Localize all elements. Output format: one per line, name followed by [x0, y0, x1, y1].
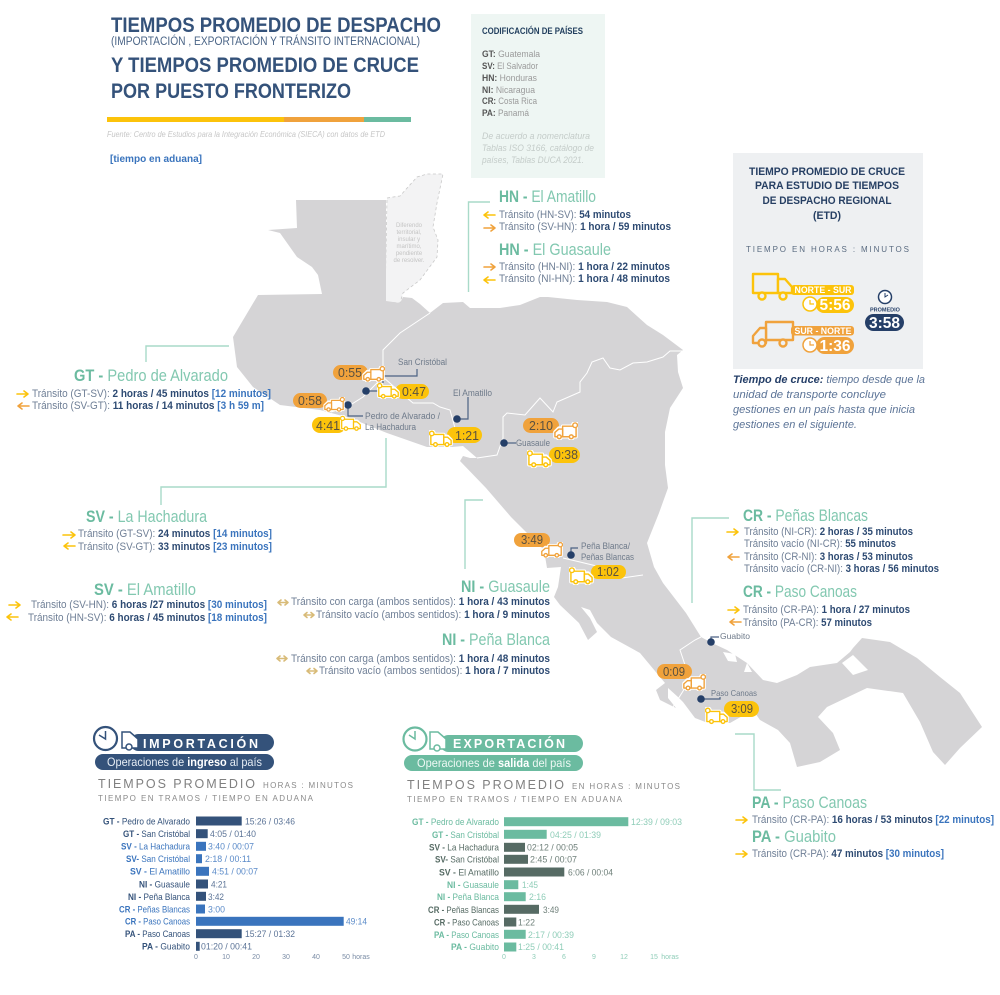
exportación header — [404, 728, 583, 771]
map pin: Paso Canoas: Paso Canoas — [711, 688, 757, 698]
average value: 3:58 — [869, 315, 900, 332]
exportación values: 1:22 — [518, 918, 535, 928]
importación values: 4:21 — [211, 880, 227, 890]
exportación axis: horas — [661, 954, 679, 961]
map pin: Guasaule — [500, 418, 580, 467]
north-south value: NORTE - SUR — [794, 285, 852, 296]
panel: country codes: NI: Nicaragua — [482, 85, 536, 96]
panel: SV La Hachadura — [63, 508, 272, 553]
south-north value: 1:36 — [820, 338, 851, 355]
exportación values: 2:16 — [529, 892, 546, 903]
title: TIEMPOS PROMEDIO DE DESPACHO — [111, 14, 441, 37]
map pin: Paso Canoas: 0:09 — [663, 664, 685, 679]
map pin: Guasaule: 2:10 — [529, 418, 553, 433]
disputed territory: Belize area: Diferendo — [396, 223, 423, 229]
map pin: Guasaule: 0:38 — [554, 447, 578, 462]
south-north value: SUR - NORTE — [794, 326, 852, 337]
exportación row labels: SV - La Hachadura — [429, 842, 500, 854]
map pin: El Amatillo: El Amatillo — [453, 388, 492, 398]
panel: CR Peñas Blancas — [727, 507, 939, 575]
importación axis: 40 — [312, 954, 320, 961]
map pin: Peña Blanca / Peñas Blancas: 3:49 — [521, 532, 543, 547]
importación axis: 10 — [222, 954, 230, 961]
exportación values: 02:12 / 00:05 — [527, 842, 578, 854]
importación values — [201, 816, 367, 952]
panel: CR Peñas Blancas: CR - Peñas Blancas — [743, 507, 868, 525]
landmass — [233, 200, 982, 767]
exportación values — [518, 817, 682, 953]
exportación row labels: CR - Paso Canoas — [434, 918, 499, 928]
panel: CR Paso Canoas: CR - Paso Canoas — [743, 583, 857, 601]
average value: PROMEDIO — [870, 308, 901, 314]
panel: SV La Hachadura: Tránsito (GT-SV): 24 minutos [14 minutos] — [78, 528, 272, 540]
map pin: Pedro de Alvarado / La Hachadura: 0:58 — [298, 393, 322, 408]
exportación axis: 3 — [532, 954, 536, 961]
importación header: Operaciones de ingreso al país — [107, 755, 262, 769]
exportación values: 1:45 — [522, 880, 538, 891]
exportación bars — [504, 817, 628, 952]
panel: country codes — [471, 14, 605, 178]
panel: NI Peña Blanca — [277, 631, 551, 677]
panel: SV El Amatillo: SV - El Amatillo — [94, 581, 196, 599]
map pin: El Amatillo — [429, 388, 492, 447]
importación values: 4:51 / 00:07 — [212, 866, 258, 878]
exportación row labels: NI - Guasaule — [447, 880, 499, 891]
panel: SV La Hachadura: SV - La Hachadura — [86, 508, 208, 526]
map pin: Guabito — [707, 631, 750, 646]
panel: NI Guasaule: NI - Guasaule — [461, 578, 550, 596]
importación row labels: PA - Guabito — [142, 942, 190, 952]
panel: country codes: HN: Honduras — [482, 73, 537, 84]
exportación row labels: PA - Paso Canoas — [434, 930, 499, 941]
importación row labels: NI - Peña Blanca — [128, 892, 191, 903]
south-north value — [791, 326, 854, 355]
map pin: Guasaule: Guasaule — [516, 438, 550, 448]
callout brackets — [146, 202, 781, 790]
importación row labels: SV - El Amatillo — [130, 866, 190, 878]
exportación values: 3:49 — [543, 905, 559, 916]
panel: country codes: Tablas ISO 3166, catálogo de — [482, 143, 594, 154]
panel: HN border posts: HN - El Amatillo — [499, 188, 596, 206]
title: Y TIEMPOS PROMEDIO DE CRUCE — [111, 54, 419, 77]
panel: NI Guasaule: Tránsito vacío (ambos sentidos): 1 hora / 9 minutos — [316, 609, 550, 621]
exportación header: EXPORTACIÓN — [453, 736, 565, 751]
panel: HN border posts: Tránsito (HN-SV): 54 minutos — [499, 209, 631, 221]
panel: GT Pedro de Alvarado: GT - Pedro de Alvarado — [74, 367, 228, 385]
importación values: 2:18 / 00:11 — [205, 854, 251, 865]
panel: country codes: De acuerdo a nomenclatura — [482, 131, 590, 142]
exportación values: 6:06 / 00:04 — [568, 868, 613, 878]
map pin: Peña Blanca / Peñas Blancas: Peña Blanca/ — [581, 541, 630, 551]
exportación row labels: CR - Peñas Blancas — [428, 905, 499, 916]
disputed territory: Belize area: insular y — [398, 237, 420, 243]
importación chart subtitle — [98, 777, 353, 803]
importación chart subtitle: TIEMPOS PROMEDIO — [98, 777, 255, 791]
crossing time definition: unidad de transporte concluye — [733, 389, 886, 401]
map pin: Peña Blanca / Peñas Blancas: 1:02 — [597, 564, 619, 579]
panel: CR Peñas Blancas: Tránsito (NI-CR): 2 horas / 35 minutos — [744, 526, 913, 538]
importación values: 3:00 — [208, 904, 225, 916]
map pin: Peña Blanca / Peñas Blancas: Peñas Blancas — [581, 552, 634, 562]
exportación row labels: SV- San Cristóbal — [435, 854, 499, 866]
map pin: San Cristóbal — [333, 357, 447, 399]
exportación values: 04:25 / 01:39 — [550, 830, 601, 841]
icon: yellow truck, north-south — [753, 274, 792, 300]
panel: CR Paso Canoas — [728, 583, 910, 629]
disputed territory: Belize area: marítimo, — [396, 244, 422, 250]
panel: country codes: CR: Costa Rica — [482, 96, 538, 107]
panel: average crossing time: DE DESPACHO REGIONAL — [762, 195, 892, 207]
exportación row labels: GT - Pedro de Alvarado — [412, 817, 499, 828]
panel: NI Peña Blanca: Tránsito vacío (ambos sentidos): 1 hora / 7 minutos — [319, 665, 550, 677]
importación row labels: NI - Guasaule — [139, 880, 190, 890]
disputed territory: Belize area: territorial, — [396, 230, 422, 236]
panel: exportación chart — [404, 728, 682, 961]
disputed territory: Belize area — [385, 174, 443, 303]
exportación row labels: NI - Peña Blanca — [437, 892, 500, 903]
importación values: 01:20 / 00:41 — [201, 942, 252, 952]
panel: SV El Amatillo: Tránsito (HN-SV): 6 horas / 45 minutos [18 minutos] — [28, 612, 267, 624]
map pin: San Cristóbal: 0:55 — [338, 365, 362, 380]
map pin: Peña Blanca / Peñas Blancas — [514, 532, 634, 584]
panel: country codes: CODIFICACIÓN DE PAÍSES — [482, 25, 583, 36]
panel: CR Peñas Blancas: Tránsito vacío (NI-CR): 55 minutos — [744, 538, 896, 550]
exportación values: 1:25 / 00:41 — [518, 942, 564, 953]
crossing time definition: Tiempo de cruce: tiempo desde que la — [733, 374, 925, 386]
panel: HN border posts: Tránsito (SV-HN): 1 hora / 59 minutos — [499, 221, 671, 233]
map pin: San Cristóbal: San Cristóbal — [398, 357, 447, 367]
importación row labels: CR - Peñas Blancas — [119, 904, 190, 916]
importación axis: 50 — [342, 954, 350, 961]
importación row labels: GT - Pedro de Alvarado — [103, 816, 190, 828]
importación row labels — [103, 816, 191, 952]
importación values: 3:42 — [208, 892, 224, 903]
exportación chart subtitle: TIEMPOS PROMEDIO — [407, 778, 564, 792]
exportación axis: 0 — [502, 954, 506, 961]
panel: PA Guabito: PA - Guabito — [752, 828, 836, 846]
exportación values: 12:39 / 09:03 — [631, 817, 682, 828]
panel: average crossing time: TIEMPO EN HORAS : MINUTOS — [746, 245, 909, 254]
legend: tiempo en aduana: [tiempo en aduana] — [110, 153, 202, 165]
disputed territory: Belize area: de resolver. — [393, 258, 425, 264]
importación bars — [196, 816, 344, 951]
panel: average crossing time: (ETD) — [813, 210, 841, 222]
exportación chart subtitle: TIEMPO EN TRAMOS / TIEMPO EN ADUANA — [407, 795, 623, 804]
icon: orange truck, south-north — [753, 322, 793, 346]
panel: SV El Amatillo — [7, 581, 267, 624]
exportación row labels: SV - El Amatillo — [439, 868, 499, 878]
importación row labels: PA - Paso Canoas — [125, 929, 190, 940]
importación row labels: GT - San Cristóbal — [123, 829, 190, 840]
panel: importación chart — [94, 727, 370, 961]
panel: SV El Amatillo: Tránsito (SV-HN): 6 horas /27 minutos [30 minutos] — [31, 599, 267, 611]
panel: HN border posts: Tránsito (HN-NI): 1 hora / 22 minutos — [499, 261, 670, 273]
crossing time definition: gestiones en el siguiente. — [733, 419, 857, 431]
importación header: IMPORTACIÓN — [143, 736, 258, 751]
source note: Fuente: Centro de Estudios para la Integración Económica (SIECA) con datos de ETD — [107, 129, 385, 139]
title — [111, 14, 441, 103]
map of Central America — [233, 174, 982, 767]
title: (IMPORTACIÓN , EXPORTACIÓN Y TRÁNSITO INTERNACIONAL) — [111, 35, 420, 48]
map pin: El Amatillo: 1:21 — [455, 428, 479, 443]
importación header — [94, 727, 274, 770]
exportación chart subtitle: EN HORAS : MINUTOS — [572, 782, 680, 791]
panel: CR Peñas Blancas: Tránsito (CR-NI): 3 horas / 53 minutos — [744, 551, 913, 563]
importación values: 4:05 / 01:40 — [210, 829, 256, 840]
map pin: Pedro de Alvarado / La Hachadura: Pedro de Alvarado / — [365, 411, 440, 421]
panel: GT Pedro de Alvarado — [17, 367, 271, 412]
exportación values: 2:17 / 00:39 — [528, 930, 574, 941]
north-south value: 5:56 — [820, 297, 851, 314]
panel: NI Guasaule: Tránsito con carga (ambos sentidos): 1 hora / 43 minutos — [291, 596, 550, 608]
importación values: 15:26 / 03:46 — [245, 816, 295, 828]
map pin: Paso Canoas: 3:09 — [731, 701, 753, 716]
importación axis: horas — [352, 954, 370, 961]
panel: PA Guabito: Tránsito (CR-PA): 47 minutos [30 minutos] — [752, 848, 944, 860]
panel: country codes: países, Tablas DUCA 2021. — [481, 155, 584, 166]
exportación chart subtitle — [407, 778, 680, 804]
exportación axis: 15 — [650, 954, 658, 961]
panel: country codes: PA: Panamá — [482, 108, 530, 119]
map pin: Pedro de Alvarado / La Hachadura: 4:41 — [316, 418, 340, 433]
importación axis: 0 — [194, 954, 198, 961]
panel: PA Paso Canoas: PA - Paso Canoas — [752, 794, 867, 812]
importación axis — [194, 954, 370, 961]
importación values: 49:14 — [346, 916, 367, 928]
panel: HN border posts: Tránsito (NI-HN): 1 hora / 48 minutos — [499, 273, 670, 285]
map pin: Pedro de Alvarado / La Hachadura: La Hachadura — [365, 422, 416, 432]
panel: NI Peña Blanca: Tránsito con carga (ambos sentidos): 1 hora / 48 minutos — [291, 653, 550, 665]
map pin: San Cristóbal: 0:47 — [402, 384, 426, 399]
exportación axis: 9 — [592, 954, 596, 961]
importación chart subtitle: HORAS : MINUTOS — [263, 781, 353, 790]
exportación header: Operaciones de salida del país — [417, 756, 571, 770]
importación axis: 20 — [252, 954, 260, 961]
panel: average crossing time: TIEMPO PROMEDIO DE CRUCE — [749, 166, 905, 178]
exportación axis: 6 — [562, 954, 566, 961]
exportación row labels — [412, 817, 500, 953]
exportación axis — [502, 954, 679, 961]
panel: GT Pedro de Alvarado: Tránsito (SV-GT): 11 horas / 14 minutos [3 h 59 m] — [32, 400, 264, 412]
map pin: Guabito: Guabito — [720, 631, 750, 641]
tri-colour title rule — [107, 117, 411, 122]
panel: SV La Hachadura: Tránsito (SV-GT): 33 minutos [23 minutos] — [78, 541, 272, 553]
map pin: Pedro de Alvarado / La Hachadura — [293, 393, 440, 433]
importación row labels: SV - La Hachadura — [121, 842, 191, 852]
importación row labels: CR - Paso Canoas — [125, 916, 190, 928]
exportación values: 2:45 / 00:07 — [530, 854, 577, 866]
importación values: 3:40 / 00:07 — [208, 842, 254, 852]
panel: CR Peñas Blancas: Tránsito vacío (CR-NI): 3 horas / 56 minutos — [744, 563, 939, 575]
exportación row labels: GT - San Cristóbal — [432, 830, 499, 841]
importación values: 15:27 / 01:32 — [245, 929, 295, 940]
importación axis: 30 — [282, 954, 290, 961]
disputed territory: Belize area: pendiente — [396, 251, 423, 257]
crossing time definition — [733, 374, 925, 431]
panel: PA Paso Canoas — [736, 794, 994, 826]
exportación axis: 12 — [620, 954, 628, 961]
panel: GT Pedro de Alvarado: Tránsito (GT-SV): 2 horas / 45 minutos [12 minutos] — [32, 388, 271, 400]
panel: CR Paso Canoas: Tránsito (CR-PA): 1 hora / 27 minutos — [743, 604, 910, 616]
map pin: Paso Canoas — [657, 664, 759, 724]
average value — [865, 290, 904, 332]
panel: PA Guabito — [736, 828, 944, 860]
panel: NI Guasaule — [278, 578, 550, 621]
panel: average crossing time — [733, 153, 923, 369]
panel: NI Peña Blanca: NI - Peña Blanca — [442, 631, 551, 649]
north-south value — [791, 285, 854, 314]
panel: CR Paso Canoas: Tránsito (PA-CR): 57 minutos — [743, 617, 872, 629]
panel: HN border posts — [484, 188, 671, 285]
exportación row labels: PA - Guabito — [451, 942, 499, 953]
panel: average crossing time: PARA ESTUDIO DE TIEMPOS — [755, 180, 899, 192]
crossing time definition: gestiones en un país hasta que inicia — [733, 404, 915, 416]
importación row labels: SV- San Cristóbal — [126, 854, 190, 865]
panel: PA Paso Canoas: Tránsito (CR-PA): 16 horas / 53 minutos [22 minutos] — [752, 814, 994, 826]
title: POR PUESTO FRONTERIZO — [111, 80, 351, 103]
panel: country codes: GT: Guatemala — [482, 49, 541, 60]
importación chart subtitle: TIEMPO EN TRAMOS / TIEMPO EN ADUANA — [98, 794, 314, 803]
panel: HN border posts: HN - El Guasaule — [499, 241, 611, 259]
panel: country codes: SV: El Salvador — [482, 61, 538, 72]
